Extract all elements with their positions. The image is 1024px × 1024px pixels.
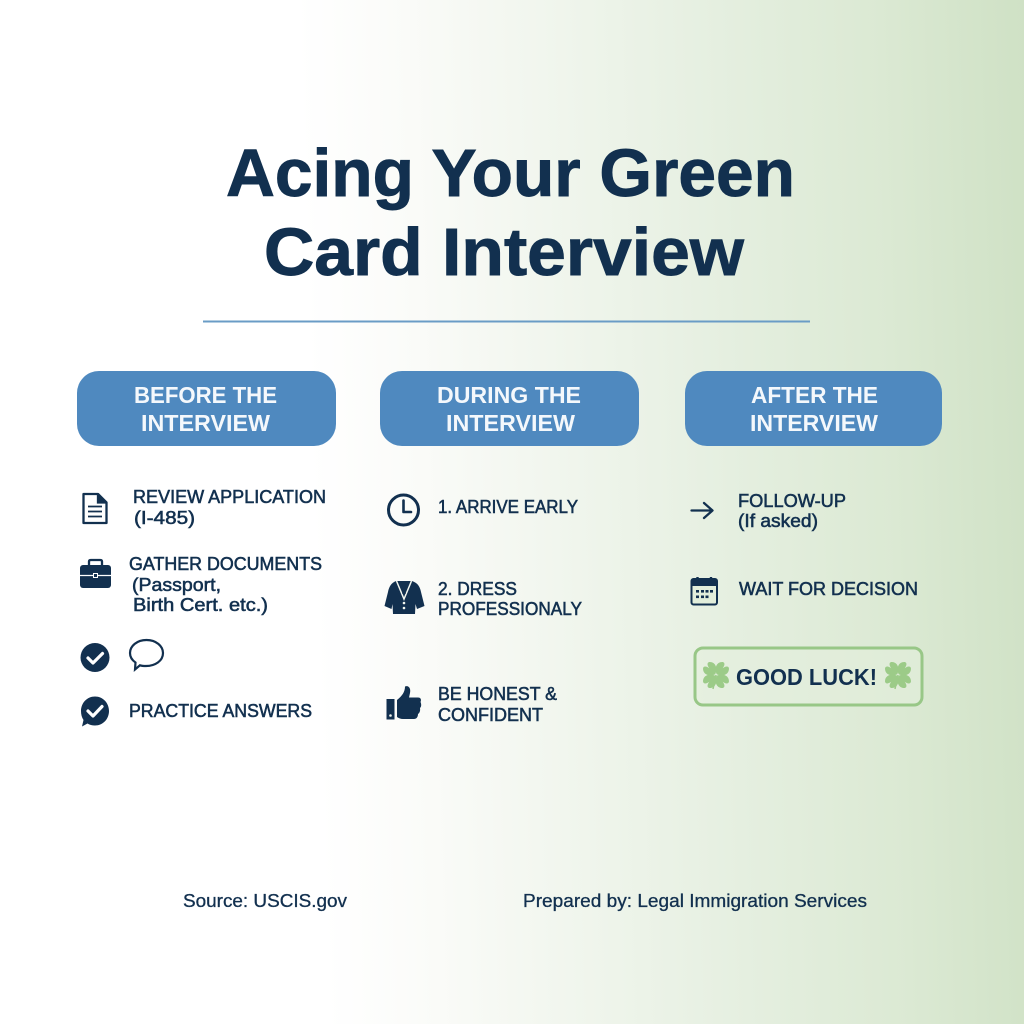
icon: check circle	[80, 643, 110, 672]
text: wait for decision: WAIT FOR DECISION	[739, 579, 918, 599]
icon: arrow	[692, 503, 712, 518]
heading: after the interview: AFTER THE	[751, 382, 878, 408]
text: be honest and confident: CONFIDENT	[438, 705, 543, 725]
footer: source: Source: USCIS.gov	[183, 891, 347, 911]
heading: during the interview	[380, 371, 639, 446]
callout: good luck: GOOD LUCK!	[736, 664, 877, 690]
text: gather documents	[129, 554, 322, 615]
heading: before the interview: INTERVIEW	[141, 410, 270, 436]
heading: before the interview	[77, 371, 336, 446]
text: review application	[133, 487, 326, 528]
heading: during the interview: INTERVIEW	[446, 410, 575, 436]
icon: briefcase	[80, 560, 111, 588]
text: be honest and confident	[438, 684, 557, 725]
panel: during the interview	[380, 371, 639, 725]
heading: before the interview: BEFORE THE	[134, 382, 277, 408]
heading: after the interview	[685, 371, 942, 446]
text: gather documents: GATHER DOCUMENTS	[129, 554, 322, 574]
text: practice answers: PRACTICE ANSWERS	[129, 701, 312, 721]
callout: good luck	[695, 648, 922, 705]
icon: check speech bubble	[81, 696, 109, 726]
icon: suit jacket	[384, 581, 424, 614]
title: Acing Your Green	[226, 136, 795, 211]
text: arrive early: 1. ARRIVE EARLY	[438, 497, 578, 517]
title: Card Interview	[264, 215, 745, 290]
heading: after the interview: INTERVIEW	[750, 410, 878, 436]
text: dress professionally: 2. DRESS	[438, 579, 517, 599]
icon: document	[84, 494, 106, 523]
icon: calendar	[692, 577, 717, 604]
footer: prepared by: Prepared by: Legal Immigration Services	[523, 891, 867, 911]
text: be honest and confident: BE HONEST &	[438, 684, 557, 704]
heading: during the interview: DURING THE	[437, 382, 581, 408]
text: follow-up: FOLLOW-UP	[738, 491, 846, 511]
text: review application: REVIEW APPLICATION	[133, 487, 326, 507]
icon: thumbs up	[386, 686, 421, 720]
text: dress professionally: PROFESSIONALY	[438, 599, 582, 619]
text: dress professionally	[438, 579, 582, 619]
panel: before the interview	[77, 371, 336, 726]
text: gather documents: (Passport,	[132, 575, 221, 595]
icon: left clover	[701, 660, 731, 690]
icon: speech bubble	[130, 640, 163, 670]
title	[226, 136, 795, 290]
text: gather documents: Birth Cert. etc.)	[133, 595, 268, 615]
text: follow-up: (If asked)	[738, 511, 818, 531]
text: review application: (I-485)	[134, 508, 195, 528]
text: follow-up	[738, 491, 846, 531]
icon: right clover	[883, 660, 913, 690]
panel: after the interview	[685, 371, 942, 705]
icon: clock	[388, 495, 418, 525]
